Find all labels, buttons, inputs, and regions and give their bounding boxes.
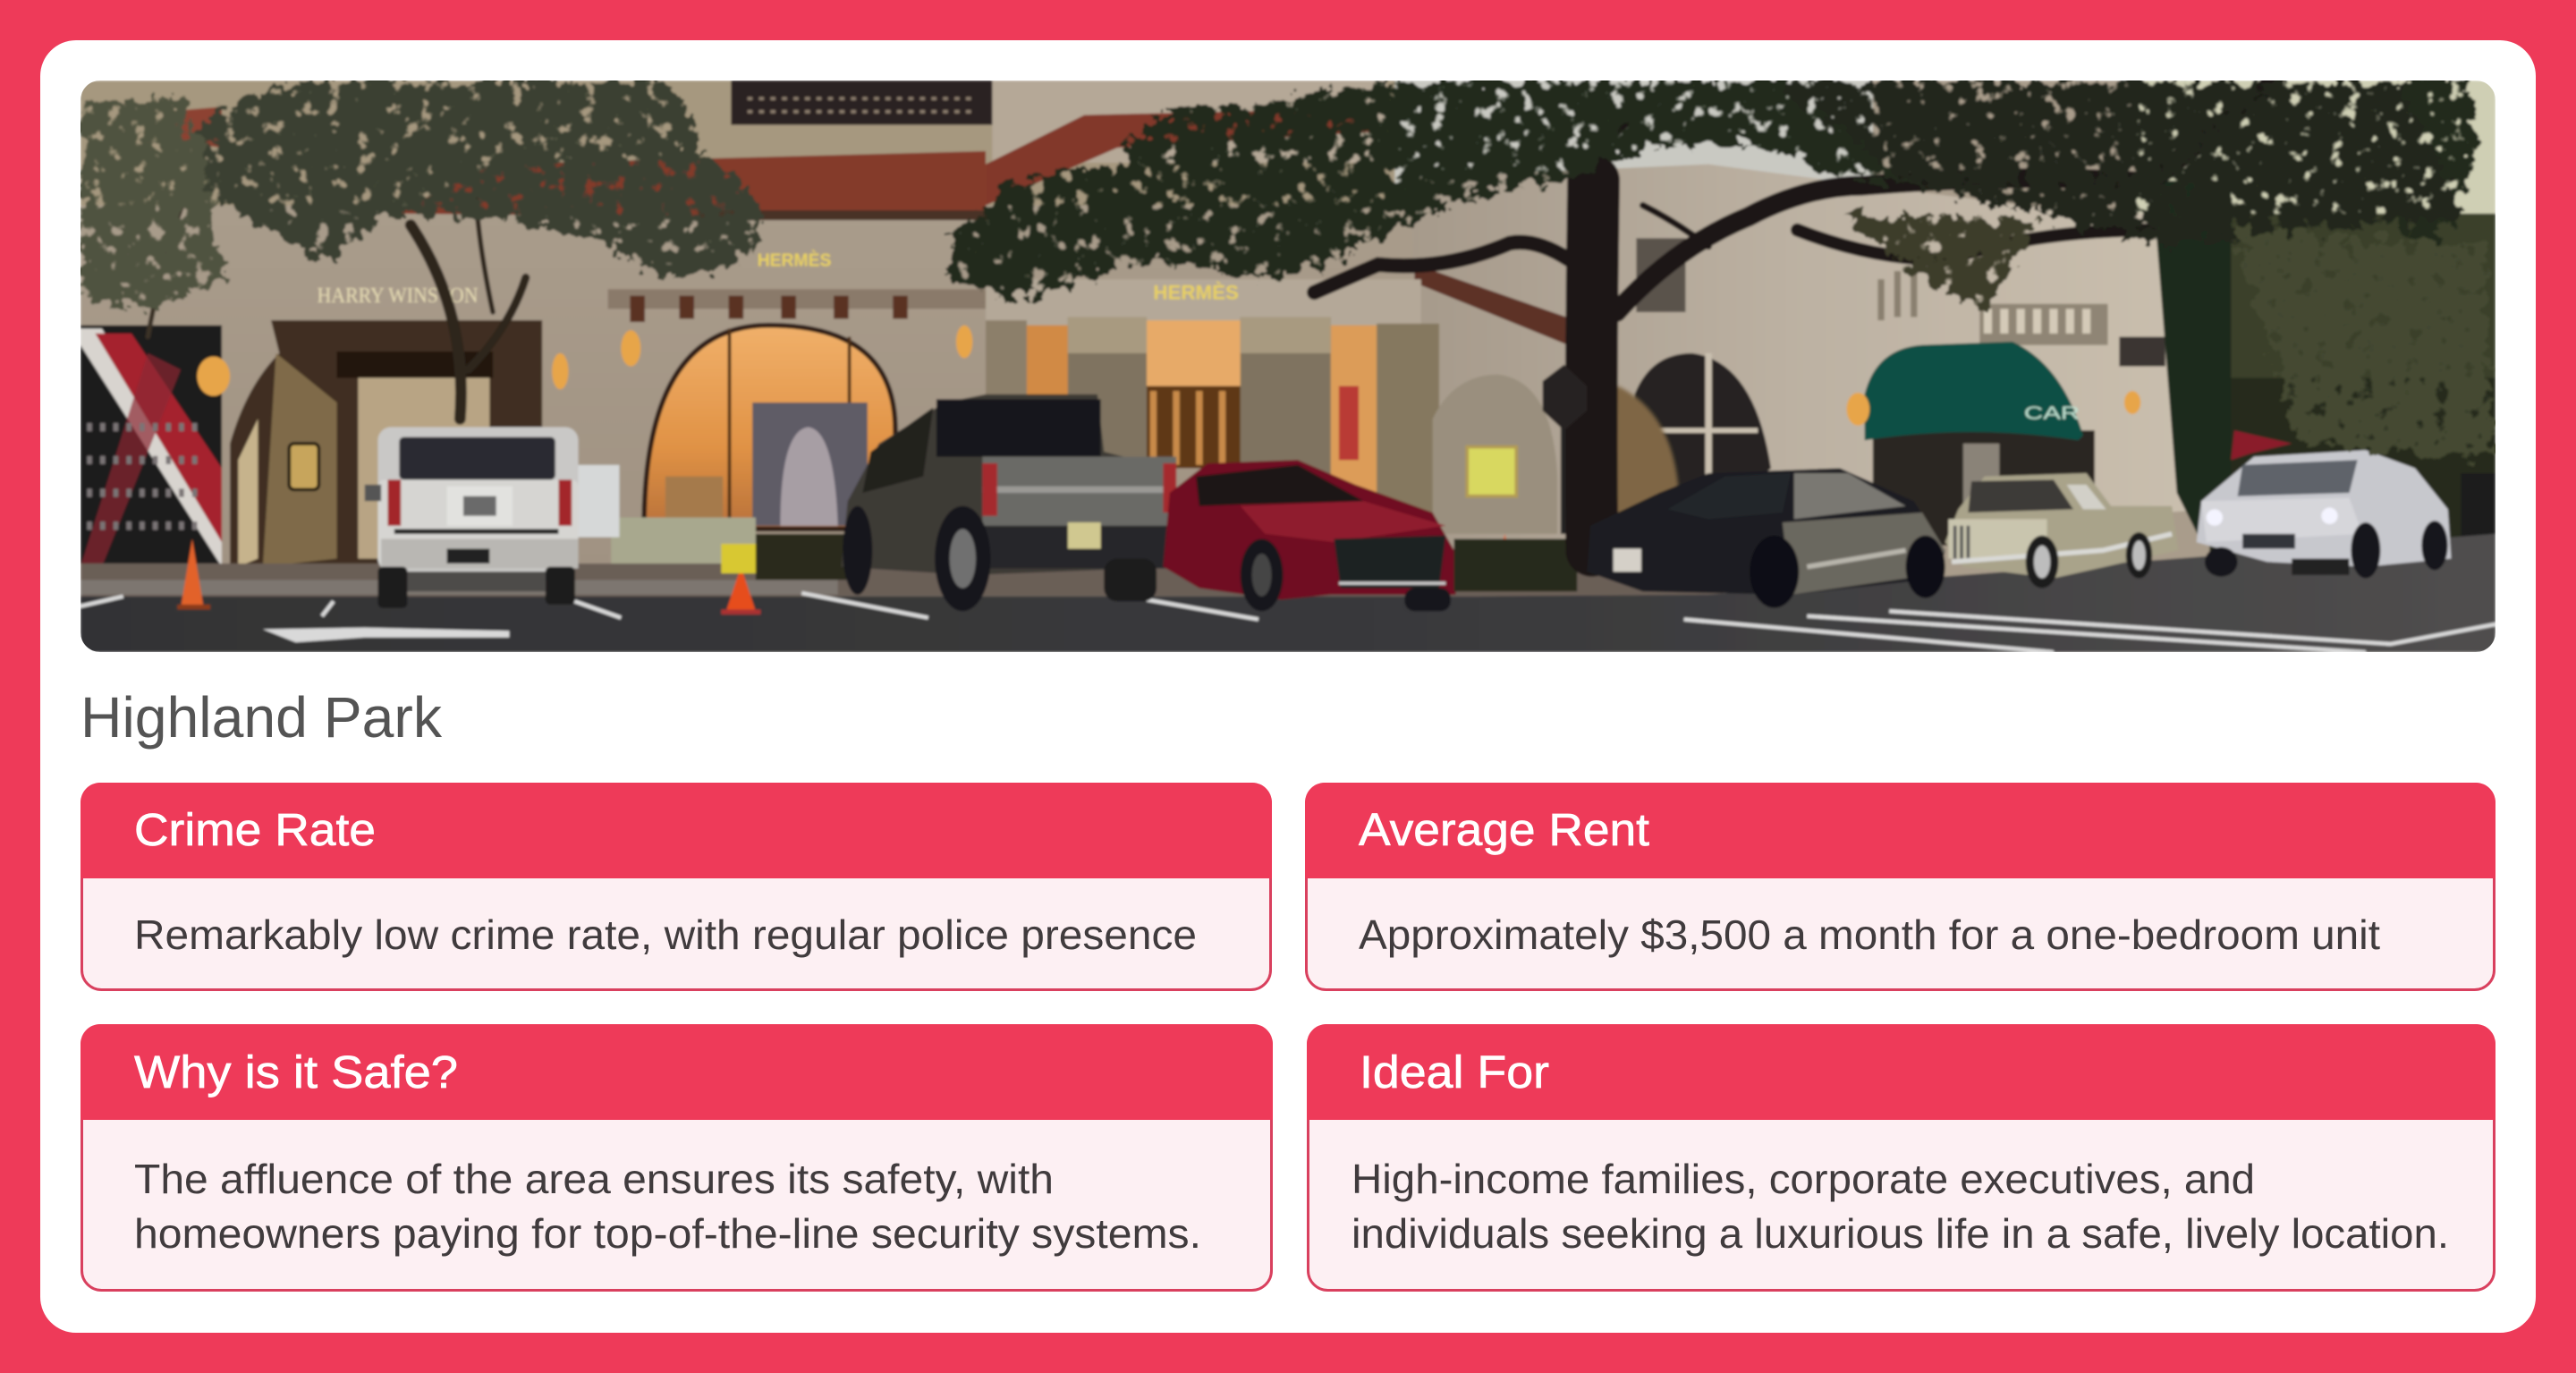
body: average rent: Approximately $3,500 a month for a one-bedroom unit	[1359, 911, 2380, 958]
street sign	[1543, 365, 1587, 534]
store cornice	[608, 289, 994, 309]
body: why is it safe	[134, 1156, 1201, 1257]
heading: average rent: Average Rent	[1359, 804, 1649, 855]
cream classic car	[1945, 473, 2179, 589]
balcony railing	[731, 81, 992, 125]
grey pickup truck	[841, 394, 1180, 611]
tree trunks and branches	[148, 82, 2274, 550]
Hermes sign center: HERMÈS	[1153, 281, 1239, 303]
body: ideal for	[1352, 1156, 2449, 1257]
small shrub	[1580, 386, 1680, 542]
parking lines	[80, 593, 2496, 652]
card header: ideal for	[1307, 1024, 2496, 1120]
card: crime rate	[80, 783, 1272, 989]
heading: why is it safe: Why is it Safe?	[134, 1047, 458, 1098]
planter banner	[610, 515, 758, 564]
card header: average rent	[1305, 783, 2496, 878]
traffic cones	[177, 534, 1514, 614]
left tree foliage	[80, 81, 761, 312]
small window and parapet	[1636, 238, 2165, 367]
dark Tesla	[1587, 468, 1945, 608]
ground: sidewalk and asphalt	[80, 534, 2496, 652]
card: why is it safe	[80, 1024, 1273, 1290]
central oak foliage	[947, 81, 2496, 460]
white SUV	[365, 428, 579, 608]
card: average rent	[1305, 783, 2496, 989]
heading: ideal for: Ideal For	[1360, 1047, 1549, 1098]
heading: crime rate: Crime Rate	[134, 804, 376, 855]
upper storey wall	[80, 81, 1394, 212]
wall lanterns	[197, 326, 2195, 426]
card header: crime rate	[80, 783, 1272, 878]
stone portico with glowing glass	[986, 317, 1439, 521]
arched dark window right	[1633, 352, 1773, 487]
green awning	[1865, 342, 2095, 546]
card: ideal for	[1307, 1024, 2496, 1290]
white Porsche	[2197, 450, 2451, 579]
striped panel	[80, 326, 222, 567]
Harry Winston entrance	[230, 320, 542, 567]
body: crime rate: Remarkably low crime rate, with regular police presence	[134, 911, 1197, 958]
sign board	[575, 465, 619, 538]
title: Highland Park	[80, 685, 443, 750]
sky	[1394, 81, 2496, 216]
card header: why is it safe	[80, 1024, 1273, 1120]
body: why is it safe: homeowners paying for top-of-the-line security systems.	[134, 1210, 1201, 1257]
blank arch with lit display	[1433, 375, 1557, 534]
right building wall	[1413, 165, 2209, 567]
hedge	[756, 534, 846, 580]
green awning: CAR	[2024, 403, 2080, 423]
body: why is it safe: The affluence of the area ensures its safety, with	[134, 1156, 1054, 1202]
main wall left	[80, 206, 1428, 575]
red sedan	[1163, 460, 1459, 611]
back trees right	[2152, 181, 2496, 591]
hedge by cone	[1454, 538, 1577, 591]
Harry Winston sign: HARRY WINSTON	[317, 284, 478, 308]
body: ideal for: individuals seeking a luxurious life in a safe, lively location.	[1352, 1210, 2449, 1257]
terracotta roofs	[165, 106, 1380, 220]
arched window	[644, 326, 895, 534]
Hermes sign left: HERMÈS	[758, 250, 831, 271]
photo: Highland Park storefronts	[80, 81, 2496, 652]
body: ideal for: High-income families, corporate executives, and	[1352, 1156, 2255, 1202]
